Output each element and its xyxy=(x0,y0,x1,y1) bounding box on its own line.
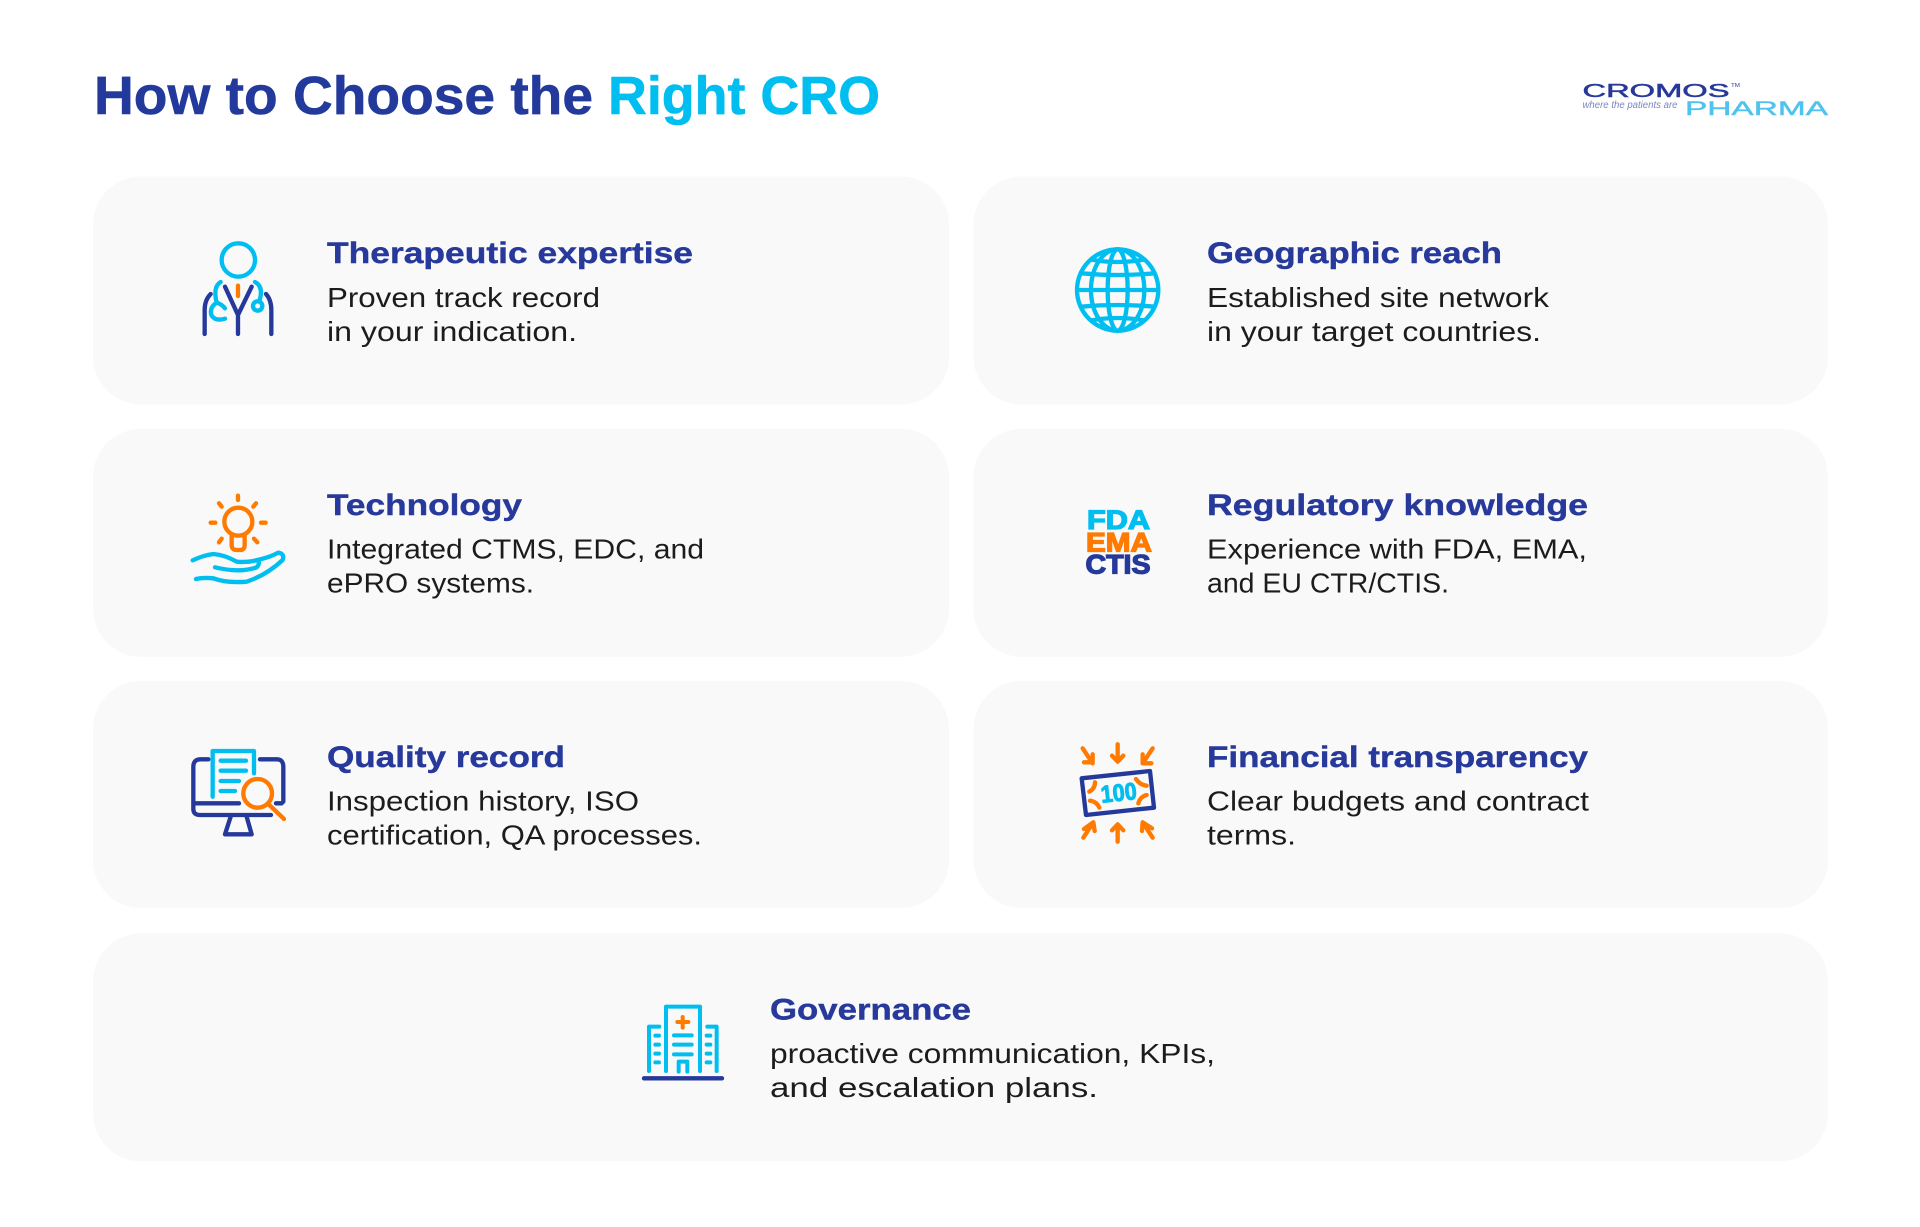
icon: banknote with arrows: 100 xyxy=(1099,778,1138,809)
body text: Established site network xyxy=(1207,282,1550,313)
body text xyxy=(327,533,704,598)
panel: geographic reach xyxy=(974,176,1828,404)
title: How to Choose the xyxy=(94,66,593,126)
logo: Cromos Pharma xyxy=(1582,80,1828,120)
body text: ePRO systems. xyxy=(327,567,534,598)
panel: financial transparency xyxy=(974,681,1828,908)
icon: FDA EMA CTIS: EMA xyxy=(1086,528,1152,558)
body text xyxy=(1207,786,1589,851)
body text: and EU CTR/CTIS. xyxy=(1207,567,1449,598)
heading: Geographic reach xyxy=(1207,237,1502,270)
icon: FDA EMA CTIS xyxy=(1086,505,1152,580)
icon: FDA EMA CTIS: FDA xyxy=(1087,505,1150,535)
panel: quality record xyxy=(93,681,949,908)
body text xyxy=(1207,533,1587,598)
icon: doctor xyxy=(205,243,271,334)
icon: banknote with arrows xyxy=(1082,744,1154,842)
heading: Governance xyxy=(770,994,971,1026)
logo: Cromos Pharma: PHARMA xyxy=(1685,98,1828,120)
icon: lightbulb over hand xyxy=(193,496,283,582)
panel: governance xyxy=(93,933,1828,1161)
logo: Cromos Pharma: where the patients are xyxy=(1582,100,1678,111)
body text: Integrated CTMS, EDC, and xyxy=(327,533,704,564)
body text: Clear budgets and contract xyxy=(1207,786,1589,817)
body text xyxy=(327,282,600,347)
body text: Proven track record xyxy=(327,282,600,313)
title xyxy=(94,66,880,126)
body text xyxy=(327,786,702,851)
icon: hospital building xyxy=(644,1007,722,1078)
heading: Therapeutic expertise xyxy=(327,237,693,270)
body text: Inspection history, ISO xyxy=(327,786,639,817)
heading: Regulatory knowledge xyxy=(1207,489,1588,522)
panel: technology xyxy=(93,429,949,657)
heading: Technology xyxy=(327,489,522,522)
heading: Financial transparency xyxy=(1207,741,1588,774)
body text: in your target countries. xyxy=(1207,316,1541,347)
logo: Cromos Pharma: TM xyxy=(1731,83,1740,89)
body text: Experience with FDA, EMA, xyxy=(1207,533,1587,564)
icon: monitor with document and magnifier xyxy=(193,751,284,834)
icon: FDA EMA CTIS: CTIS xyxy=(1086,550,1150,580)
heading: Quality record xyxy=(327,741,565,774)
title: Right CRO xyxy=(608,66,880,126)
body text: in your indication. xyxy=(327,316,577,347)
body text: and escalation plans. xyxy=(770,1072,1098,1103)
body text: certification, QA processes. xyxy=(327,820,702,851)
body text: proactive communication, KPIs, xyxy=(770,1038,1215,1069)
body text: terms. xyxy=(1207,820,1296,851)
panel: regulatory knowledge xyxy=(974,429,1828,657)
body text xyxy=(770,1038,1215,1103)
panel: therapeutic expertise xyxy=(93,176,949,404)
body text xyxy=(1207,282,1550,347)
logo: Cromos Pharma: CROMOS xyxy=(1582,80,1730,101)
icon: globe xyxy=(1077,249,1158,331)
